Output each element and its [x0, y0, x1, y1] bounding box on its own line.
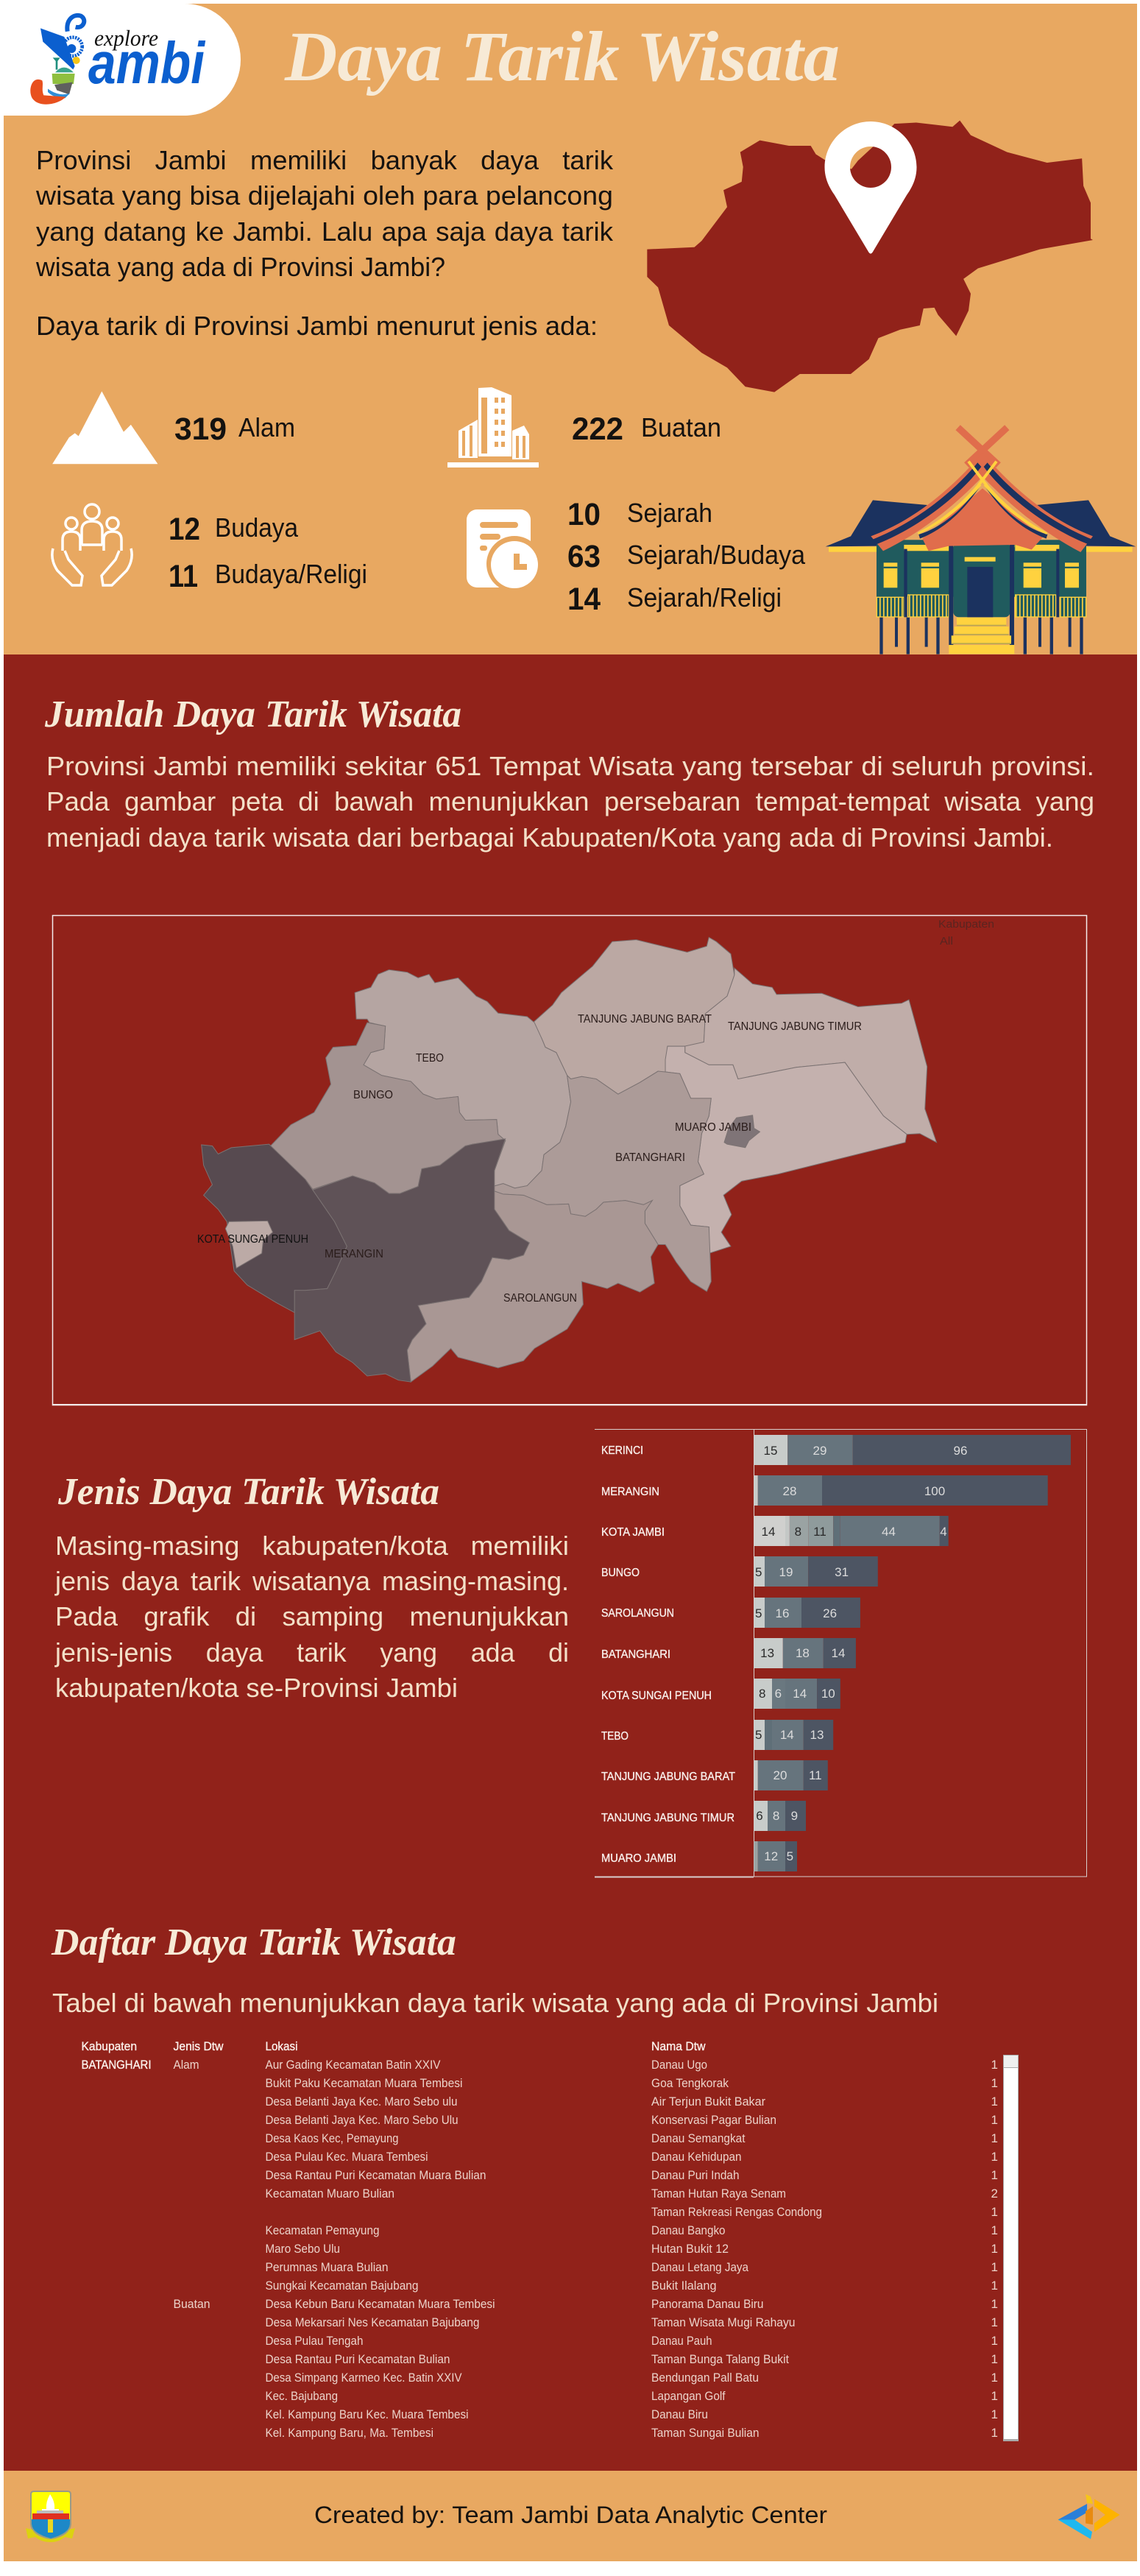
bar: Kota Jambi [601, 1516, 949, 1546]
text block: jumlah description: Provinsi Jambi memiliki sekitar 651 Tempat Wisata yang tersebar di seluruh provinsi. [46, 751, 1094, 781]
bar: Tebo: TEBO [601, 1730, 629, 1743]
column: nama dtw [651, 2058, 822, 2440]
bar: Kota Sungai Penuh: 8 [759, 1687, 765, 1701]
bar: Bungo [601, 1556, 878, 1587]
map region labels: SAROLANGUN [503, 1292, 577, 1305]
column: nama dtw: Danau Ugo [651, 2058, 707, 2072]
heading: Jumlah Daya Tarik Wisata: Jumlah Daya Tarik Wisata [44, 694, 461, 735]
table header: Jenis Dtw [174, 2039, 224, 2053]
bar: Kota Sungai Penuh: 10 [821, 1687, 835, 1701]
column: kabupaten and jenis: Buatan [174, 2297, 210, 2311]
map regions [202, 937, 937, 1382]
bar: Kota Jambi: 8 [795, 1525, 801, 1539]
column: count: 1 [991, 2389, 998, 2403]
column: nama dtw: Taman Hutan Raya Senam [651, 2187, 786, 2201]
column: nama dtw: Konservasi Pagar Bulian [651, 2113, 776, 2127]
column: count: 1 [991, 2334, 998, 2348]
bar: Sarolangun: SAROLANGUN [601, 1607, 674, 1620]
text block: table description: Tabel di bawah menunjukkan daya tarik wisata yang ada di Provinsi Jambi [52, 1988, 938, 2018]
bar: Tanjung Jabung Barat: 11 [809, 1768, 822, 1782]
map region labels: All [940, 935, 953, 948]
column: lokasi: Desa Pulau Kec. Muara Tembesi [265, 2150, 428, 2164]
bar: Kota Sungai Penuh: KOTA SUNGAI PENUH [601, 1690, 712, 1702]
map region labels: BUNGO [353, 1089, 393, 1101]
logo: Explore Jambi badge: explore [94, 25, 158, 51]
icon: mountain [52, 392, 157, 464]
text block: types intro: Daya tarik di Provinsi Jambi menurut jenis ada: [36, 311, 598, 341]
column: lokasi: Desa Kaos Kec, Pemayung [265, 2131, 399, 2145]
title: Daya Tarik Wisata [284, 17, 840, 96]
column: count: 1 [991, 2223, 998, 2237]
bar chart: jenis per kabupaten [595, 1430, 1086, 1877]
bar: Kerinci: 96 [954, 1444, 967, 1458]
column: nama dtw: Taman Sungai Bulian [651, 2426, 760, 2440]
bar: Sarolangun: 16 [776, 1606, 789, 1620]
column: count: 1 [991, 2168, 998, 2182]
bar: Tanjung Jabung Barat: TANJUNG JABUNG BARAT [601, 1771, 735, 1783]
bar: Muaro Jambi: 5 [787, 1849, 793, 1863]
column: lokasi: Perumnas Muara Bulian [265, 2260, 389, 2274]
icon: buildings [447, 387, 539, 467]
table header: Nama Dtw [651, 2039, 706, 2053]
bar: Sarolangun: 26 [823, 1606, 837, 1620]
column: nama dtw: Danau Biru [651, 2407, 708, 2421]
icon: Jambi Data Analytic Center logo [1058, 2494, 1120, 2539]
column: lokasi: Desa Rantau Puri Kecamatan Bulian [265, 2352, 450, 2366]
text block: jenis description: Masing-masing kabupaten/kota memiliki [55, 1531, 569, 1561]
text block: jenis description: Pada grafik di samping menunjukkan [55, 1601, 569, 1631]
column: lokasi: Kec. Bajubang [265, 2389, 338, 2403]
column: count: 2 [991, 2187, 998, 2201]
column: kabupaten and jenis: BATANGHARI [81, 2058, 152, 2072]
column: lokasi: Desa Pulau Tengah [265, 2334, 364, 2348]
text block: introduction: Provinsi Jambi memiliki banyak daya tarik [36, 145, 614, 175]
column: lokasi: Desa Rantau Puri Kecamatan Muara Bulian [265, 2168, 486, 2182]
map region labels [197, 918, 994, 1305]
column: lokasi: Maro Sebo Ulu [265, 2242, 340, 2256]
text block: jenis description: jenis daya tarik wisatanya masing-masing. [54, 1566, 569, 1596]
bar: Kota Jambi: 11 [813, 1525, 826, 1539]
text block: jumlah description [46, 751, 1094, 853]
column: nama dtw: Danau Kehidupan [651, 2150, 742, 2164]
bar: Tebo [601, 1720, 833, 1750]
bar: Batanghari: 13 [760, 1646, 774, 1660]
column: count: 1 [991, 2352, 998, 2366]
panel: footer background [4, 2471, 1137, 2561]
stat: Sejarah/Budaya: 63 [567, 539, 601, 574]
bar: Kerinci: 29 [813, 1444, 826, 1458]
text block: introduction: yang datang ke Jambi. Lalu apa saja daya tarik [36, 216, 614, 247]
column: lokasi: Desa Mekarsari Nes Kecamatan Bajubang [265, 2315, 480, 2329]
heading: Daftar Daya Tarik Wisata: Daftar Daya Tarik Wisata [51, 1922, 456, 1963]
column: lokasi: Aur Gading Kecamatan Batin XXIV [265, 2058, 441, 2072]
column: lokasi: Desa Belanti Jaya Kec. Maro Sebo Ulu [265, 2113, 458, 2127]
column: count: 1 [991, 2113, 998, 2127]
bar: Sarolangun [601, 1598, 860, 1628]
column: lokasi: Desa Belanti Jaya Kec. Maro Sebo ulu [265, 2095, 458, 2109]
panel: header background [4, 4, 1137, 654]
bar: Kota Jambi: 14 [762, 1525, 775, 1539]
bar: Tanjung Jabung Timur [601, 1801, 806, 1831]
column: kabupaten and jenis: Alam [174, 2058, 199, 2072]
stat: Budaya/Religi [169, 559, 367, 594]
logo: Explore Jambi badge [0, 4, 241, 116]
column: nama dtw: Hutan Bukit 12 [651, 2242, 729, 2256]
column: nama dtw: Danau Bangko [651, 2223, 726, 2237]
stat: Buatan [572, 412, 721, 447]
column: count [991, 2058, 998, 2440]
bar: Tebo: 13 [810, 1728, 824, 1742]
table header: Kabupaten [81, 2039, 137, 2053]
column: nama dtw: Danau Letang Jaya [651, 2260, 748, 2274]
bar: Merangin: MERANGIN [601, 1486, 659, 1498]
column: nama dtw: Bendungan Pall Batu [651, 2371, 759, 2385]
bar: Merangin: 28 [783, 1484, 796, 1498]
column: nama dtw: Lapangan Golf [651, 2389, 726, 2403]
column: count: 1 [991, 2242, 998, 2256]
bar: Muaro Jambi: 12 [764, 1849, 778, 1863]
bar: Muaro Jambi [601, 1841, 797, 1871]
icon: Jambi traditional house [826, 428, 1136, 654]
bar: Kota Sungai Penuh [601, 1679, 840, 1709]
bar: Bungo: 5 [755, 1565, 762, 1579]
column: lokasi: Kel. Kampung Baru Kec. Muara Tembesi [265, 2407, 468, 2421]
text block: jenis description [54, 1531, 569, 1703]
table header: Lokasi [265, 2039, 297, 2053]
column: nama dtw: Danau Pauh [651, 2334, 712, 2348]
bar: Batanghari: 18 [796, 1646, 810, 1660]
map region labels: MUARO JAMBI [675, 1121, 751, 1134]
stat: Sejarah/Religi: 14 [567, 582, 601, 617]
column: nama dtw: Air Terjun Bukit Bakar [651, 2095, 765, 2109]
stat: Budaya/Religi: 11 [169, 559, 198, 594]
bar: Batanghari [601, 1638, 856, 1668]
bar: Kota Sungai Penuh: 14 [793, 1687, 807, 1701]
bar: Tanjung Jabung Timur: 8 [773, 1809, 779, 1823]
column: count: 1 [991, 2131, 998, 2145]
column: nama dtw: Taman Wisata Mugi Rahayu [651, 2315, 795, 2329]
stat: Sejarah: Sejarah [627, 498, 712, 528]
column: lokasi: Kecamatan Muaro Bulian [265, 2187, 394, 2201]
stat: Sejarah/Budaya: Sejarah/Budaya [627, 540, 806, 570]
bar: Tebo: 14 [780, 1728, 794, 1742]
column: count: 1 [991, 2279, 998, 2293]
bar: Tebo: 5 [755, 1728, 762, 1742]
bar: Kota Jambi: KOTA JAMBI [601, 1526, 665, 1539]
map region labels: KOTA SUNGAI PENUH [197, 1233, 308, 1246]
bar: Tanjung Jabung Barat: 20 [773, 1768, 787, 1782]
table scrollbar [1004, 2055, 1019, 2441]
column: count: 1 [991, 2371, 998, 2385]
panel: red content background [4, 654, 1137, 2471]
stat: Sejarah [567, 497, 712, 532]
icon: location pin [824, 121, 917, 253]
bar: Tanjung Jabung Timur: 9 [791, 1809, 798, 1823]
column: count: 1 [991, 2205, 998, 2219]
bar: Merangin [601, 1475, 1048, 1506]
bar: Kerinci [601, 1435, 1071, 1465]
bar: Bungo: BUNGO [601, 1567, 640, 1579]
bar: Batanghari: BATANGHARI [601, 1648, 670, 1661]
text block: introduction [35, 145, 614, 282]
column: count: 1 [991, 2297, 998, 2311]
column: lokasi: Sungkai Kecamatan Bajubang [265, 2279, 418, 2293]
column: count: 1 [991, 2260, 998, 2274]
stat: Budaya/Religi: Budaya/Religi [215, 559, 367, 589]
column: nama dtw: Danau Semangkat [651, 2131, 746, 2145]
map region labels: Kabupaten [938, 918, 994, 931]
stat: Sejarah: 10 [567, 497, 601, 532]
bar: Sarolangun: 5 [755, 1606, 762, 1620]
stat: Alam [174, 412, 295, 447]
logo: Explore Jambi badge: ambi [88, 30, 206, 96]
stat: Buatan: 222 [572, 412, 623, 447]
column: count: 1 [991, 2058, 998, 2072]
text block: introduction: wisata yang bisa dijelajahi oleh para pelancong [35, 180, 613, 211]
map region labels: TEBO [416, 1052, 444, 1065]
column: count: 1 [991, 2426, 998, 2440]
column: count: 1 [991, 2095, 998, 2109]
bar: Batanghari: 14 [832, 1646, 845, 1660]
bar: Tanjung Jabung Timur: 6 [756, 1809, 763, 1823]
icon: Jambi province emblem [26, 2491, 75, 2542]
column: lokasi: Kel. Kampung Baru, Ma. Tembesi [265, 2426, 433, 2440]
bar: Tanjung Jabung Barat [601, 1760, 828, 1790]
map region labels: TANJUNG JABUNG BARAT [578, 1013, 712, 1026]
bar: Bungo: 19 [779, 1565, 793, 1579]
map: Jambi province silhouette [647, 121, 1093, 392]
stat: Budaya: 12 [169, 512, 200, 547]
bar: Muaro Jambi: MUARO JAMBI [601, 1852, 676, 1865]
column: lokasi: Bukit Paku Kecamatan Muara Tembesi [265, 2076, 462, 2090]
column: count: 1 [991, 2315, 998, 2329]
heading: Jenis Daya Tarik Wisata: Jenis Daya Tarik Wisata [57, 1471, 439, 1513]
column: nama dtw: Goa Tengkorak [651, 2076, 729, 2090]
bar: Kota Jambi: 44 [882, 1525, 896, 1539]
column: count: 1 [991, 2407, 998, 2421]
text block: jumlah description: Pada gambar peta di bawah menunjukkan persebaran tempat-tempat wisata yang [46, 786, 1094, 816]
column: lokasi: Desa Kebun Baru Kecamatan Muara Tembesi [265, 2297, 495, 2311]
column: count: 1 [991, 2076, 998, 2090]
column: lokasi [265, 2058, 495, 2440]
bar: Kota Jambi: 4 [940, 1525, 947, 1539]
text block: jenis description: jenis-jenis daya tarik yang ada di [54, 1637, 569, 1668]
text block: jumlah description: menjadi daya tarik wisata dari berbagai Kabupaten/Kota yang ada di Provinsi Jambi. [46, 822, 1053, 853]
bar: Kerinci: 15 [764, 1444, 777, 1458]
column: count: 1 [991, 2150, 998, 2164]
stat: Budaya: Budaya [215, 512, 299, 543]
bar: Kota Sungai Penuh: 6 [775, 1687, 782, 1701]
bar: Merangin: 100 [924, 1484, 945, 1498]
icon: document with clock [467, 509, 542, 592]
footer credit: Created by: Team Jambi Data Analytic Center [314, 2502, 827, 2528]
stat: Sejarah/Religi [567, 582, 782, 617]
bar: Bungo: 31 [835, 1565, 849, 1579]
column: nama dtw: Taman Rekreasi Rengas Condong [651, 2205, 822, 2219]
table header [81, 2039, 706, 2053]
column: nama dtw: Bukit Ilalang [651, 2279, 717, 2293]
column: nama dtw: Panorama Danau Biru [651, 2297, 764, 2311]
bar: Kerinci: KERINCI [601, 1444, 643, 1457]
column: lokasi: Kecamatan Pemayung [265, 2223, 380, 2237]
column: kabupaten and jenis [81, 2058, 210, 2311]
stat: Budaya [169, 512, 299, 547]
column: nama dtw: Danau Puri Indah [651, 2168, 739, 2182]
column: lokasi: Desa Simpang Karmeo Kec. Batin XXIV [265, 2371, 462, 2385]
stat: Alam: Alam [238, 412, 295, 442]
stat: Alam: 319 [174, 412, 227, 447]
map region labels: BATANGHARI [615, 1151, 685, 1164]
column: nama dtw: Taman Bunga Talang Bukit [651, 2352, 789, 2366]
map region labels: MERANGIN [325, 1248, 383, 1260]
stat: Sejarah/Religi: Sejarah/Religi [627, 582, 782, 613]
text block: jenis description: kabupaten/kota se-Provinsi Jambi [55, 1673, 458, 1703]
map region labels: TANJUNG JABUNG TIMUR [728, 1020, 862, 1033]
stat: Buatan: Buatan [641, 412, 721, 442]
bar: Tanjung Jabung Timur: TANJUNG JABUNG TIMUR [601, 1812, 734, 1824]
stat: Sejarah/Budaya [567, 539, 806, 574]
icon: people in hands [52, 504, 132, 585]
text block: introduction: wisata yang ada di Provinsi Jambi? [35, 252, 445, 282]
panel: choropleth map of Jambi [52, 916, 1087, 1405]
table: daftar daya tarik wisata [81, 2039, 1019, 2441]
